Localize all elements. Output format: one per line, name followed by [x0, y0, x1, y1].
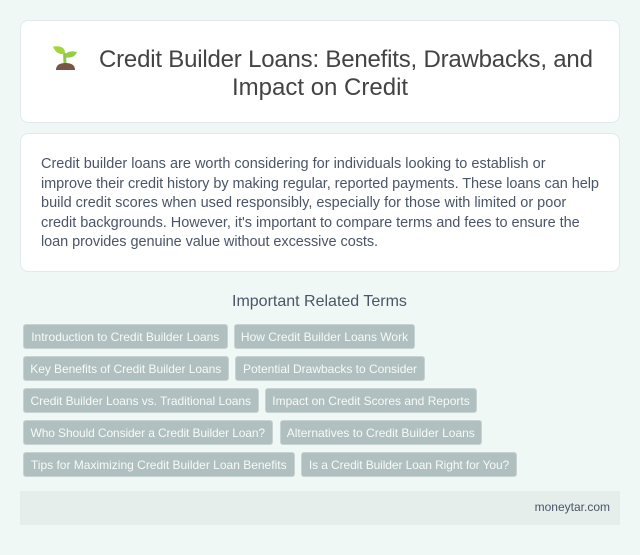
title line 1: Credit Builder Loans: Benefits, Drawbacks, and — [99, 46, 593, 73]
summary text: loan provides genuine value without excessive costs. — [41, 234, 378, 250]
summary text: improve their credit history by making regular, reported payments. These loans can help — [41, 176, 599, 192]
tag — [23, 324, 228, 349]
heading: important related terms: Important Related Terms — [232, 293, 407, 310]
tag — [280, 420, 482, 445]
tag — [23, 356, 228, 381]
tag: Credit Builder Loans vs. Traditional Loans — [31, 394, 251, 408]
summary text: Credit builder loans are worth considering for individuals looking to establish or — [41, 156, 546, 172]
panel: footer — [20, 491, 620, 525]
tag — [23, 452, 294, 477]
tag: Who Should Consider a Credit Builder Loan? — [31, 426, 265, 440]
panel: title card — [20, 20, 620, 123]
tag: Alternatives to Credit Builder Loans — [287, 426, 475, 440]
tag: How Credit Builder Loans Work — [241, 330, 408, 344]
tag: Key Benefits of Credit Builder Loans — [30, 362, 221, 376]
panel: summary card — [20, 133, 620, 272]
summary text: build credit scores when used responsibly, especially for those with limited or poor — [41, 195, 566, 211]
tag: Potential Drawbacks to Consider — [243, 362, 417, 376]
tag group — [23, 324, 517, 477]
tag — [265, 388, 477, 413]
tag: Impact on Credit Scores and Reports — [272, 394, 470, 408]
icon: sprout — [53, 46, 77, 70]
tag: Is a Credit Builder Loan Right for You? — [309, 458, 509, 472]
summary text: credit backgrounds. However, it's important to compare terms and fees to ensure the — [41, 214, 580, 230]
title line 2: Impact on Credit — [232, 74, 408, 101]
footer source text: moneytar.com — [535, 500, 610, 514]
tag — [23, 388, 258, 413]
summary text — [41, 156, 599, 250]
tag — [23, 420, 272, 445]
tag: Introduction to Credit Builder Loans — [31, 330, 219, 344]
tag — [235, 356, 425, 381]
tag: Tips for Maximizing Credit Builder Loan Benefits — [31, 458, 287, 472]
tag — [234, 324, 415, 349]
tag — [301, 452, 517, 477]
